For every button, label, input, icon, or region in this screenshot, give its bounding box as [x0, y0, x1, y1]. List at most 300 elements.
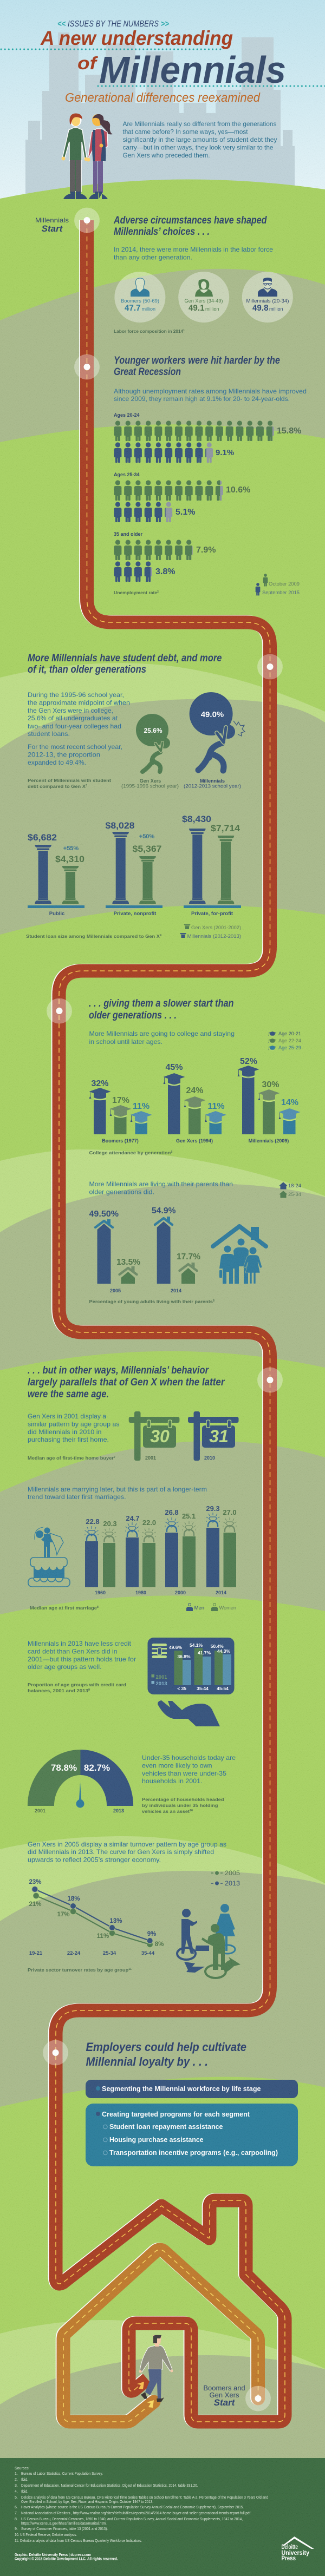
icon: sign 2001: [129, 1411, 179, 1461]
logo: Deloitte University Press: Press: [282, 2555, 296, 2562]
text block: For the most recent school year,: [28, 743, 122, 751]
columns: private for-profit: Private, for-profit: [191, 911, 233, 917]
chart: turnover rates: 35-44: [141, 1950, 155, 1956]
bars 2000: 26.8: [165, 1508, 179, 1516]
kicker: << ISSUES BY THE NUMBERS >>: [57, 19, 169, 29]
heading: Employers could help cultivate: [86, 2040, 246, 2054]
bars: Millennials: 14%: [281, 1098, 298, 1107]
panel: living with parents: [89, 1180, 301, 1304]
vehicles text: vehicles than were under-35: [142, 1770, 226, 1777]
text block: [114, 387, 307, 403]
chart: percentage living with parents: 2014: [171, 1288, 181, 1293]
icon: hand: [158, 1700, 220, 1726]
man: [62, 114, 88, 199]
text block: 25.6% of all undergraduates at: [28, 714, 118, 722]
chart: student loan size: [26, 814, 241, 939]
sources: Deloitte analysis of data from US Census Bureau, CPS Historical Time Series Tables on School Enrollment: Table A-2. Percentage of the Population 3 Years Old and: [21, 2496, 268, 2500]
chart: ages 20-24: [114, 412, 301, 463]
logo: Deloitte University Press: University: [282, 2550, 310, 2557]
text block: In 2014, there were more Millennials in the labor force: [114, 246, 273, 253]
vehicles gauge: 2001: [35, 1808, 46, 1813]
sources: 7.: [15, 2512, 18, 2515]
caption: College attendance by generation: [89, 1150, 163, 1155]
turnover text: upwards to reflect 2005’s stronger economy.: [28, 1856, 161, 1864]
title of: of: [77, 53, 98, 73]
caption: debt compared to Gen X: [28, 784, 81, 789]
columns: private for-profit: [182, 814, 241, 917]
chart: turnover rates: 25-34: [103, 1950, 116, 1956]
box: segmenting: Segmenting the Millennial workforce by life stage: [102, 2085, 261, 2093]
icon: wedding cake: [28, 1527, 70, 1587]
icon: man walking through door: [139, 2335, 173, 2402]
sources: Ibid.: [21, 2478, 28, 2482]
legend: 25-34: [288, 1192, 301, 1198]
caption: 3: [86, 784, 87, 787]
chart: turnover rates: [29, 1879, 164, 1956]
chart: median age at first marriage: [30, 1504, 237, 1611]
caption: Labor force composition in 2014: [114, 328, 185, 334]
city skyline: [25, 32, 295, 194]
legend: [211, 1870, 240, 1887]
columns: private for-profit: $7,714: [211, 823, 240, 833]
chart: ages 20-24: Ages 20-24: [114, 412, 140, 418]
footer: [0, 2458, 325, 2576]
bars 2014: 2014: [216, 1590, 226, 1595]
credits: [15, 2553, 118, 2561]
intro text: that came before? In some ways, yes—most: [122, 128, 248, 135]
chart: percentage living with parents: 49.50%: [89, 1210, 119, 1219]
caption: [28, 1682, 126, 1693]
legend: Age 25-29: [278, 1045, 301, 1051]
road: main path: [55, 220, 285, 2422]
credit card text: older age groups as well.: [28, 1663, 102, 1671]
heading: [86, 2040, 246, 2068]
legend: Millennials (2012-2013): [187, 934, 241, 939]
stat: Millennials: Millennials (20-34): [246, 298, 289, 304]
icon: turnover people cycle: [177, 1904, 240, 1978]
bars: Boomers: [89, 1079, 152, 1144]
columns: private nonprofit: $5,367: [132, 844, 161, 854]
bars 1980: 22.0: [142, 1519, 156, 1527]
chart: turnover rates: 11%: [97, 1933, 109, 1940]
chart: percentage living with parents: 13.5%: [116, 1258, 140, 1267]
caption: vehicles as an asset: [142, 1809, 186, 1814]
chart: percentage living with parents: 2005: [110, 1288, 121, 1293]
chart: percentage living with parents: 17.7%: [177, 1252, 200, 1261]
figure labels: Millennials: [200, 778, 225, 784]
legend: October 2009: [269, 581, 300, 587]
text block: similar pattern by age group as: [28, 1420, 119, 1428]
text block: [89, 1030, 235, 1046]
legend: 2005: [225, 1870, 240, 1877]
text block: the approximate midpoint of when: [28, 699, 130, 707]
panel: college attendance: [89, 998, 301, 1155]
dotted rule bottom: [98, 86, 325, 87]
turnover text: Gen Xers in 2005 display a similar turnover pattern by age group as: [28, 1841, 226, 1848]
label: Millennials start: [35, 216, 69, 234]
stat: Gen Xers: 49.1: [188, 304, 205, 313]
bars: Millennials: 30%: [262, 1080, 280, 1089]
text block: than any other generation.: [114, 253, 192, 261]
icon: sign 2010: 2010: [204, 1455, 215, 1461]
marriage text: Millennials are marrying later, but this is part of a longer-term: [28, 1486, 207, 1493]
columns: public: +55%: [63, 845, 79, 852]
figure labels: [121, 778, 241, 789]
text block: [89, 1180, 233, 1196]
chart: credit card: 45-54: [217, 1686, 229, 1691]
dotted rule top: [1, 49, 222, 50]
chart: credit card: < 35: [177, 1686, 186, 1691]
caption: [142, 1797, 224, 1814]
intro text: Gen Xers who preceded them.: [122, 152, 210, 159]
turnover text: did Millennials in 2013. The curve for Gen Xers is simply shifted: [28, 1848, 214, 1856]
caption: 9: [88, 1688, 90, 1692]
bars 1980: 1980: [135, 1590, 146, 1595]
chart: turnover rates: 21%: [29, 1901, 42, 1908]
woman: [87, 114, 113, 199]
bars 1960: [84, 1517, 117, 1595]
bars: Boomers: Boomers (1977): [102, 1138, 139, 1144]
icon: sign 2001: 2001: [145, 1455, 156, 1461]
columns: private nonprofit: $8,028: [105, 820, 134, 831]
chart: turnover rates: 13%: [109, 1918, 122, 1924]
bars 1960: 1960: [95, 1590, 106, 1595]
columns: public: $6,682: [28, 832, 57, 843]
sources: US Census Bureau, Decennial Censuses, 1890 to 1940, and Current Population Survey, Annual Social and Economic Supplements, 1947 to 2014,: [21, 2518, 243, 2521]
sources: Ibid.: [21, 2490, 28, 2494]
bars: Gen Xers: [164, 1063, 226, 1144]
heading: Adverse circumstances have shaped: [113, 215, 267, 226]
figure labels: Gen Xers: [140, 778, 161, 784]
text block: two- and four-year colleges had: [28, 722, 121, 730]
vehicles text: [142, 1754, 236, 1785]
bars: Boomers: 17%: [112, 1096, 129, 1105]
bars 1960: 22.8: [86, 1517, 100, 1526]
gauge needle: [76, 1782, 84, 1808]
chart: 35 and older: [114, 531, 216, 582]
caption: 5: [171, 1151, 173, 1154]
caption: Percentage of households headed: [142, 1797, 224, 1802]
caption: Percentage of young adults living with their parents: [89, 1299, 203, 1304]
label: Boomers and Gen Xers start: Gen Xers: [210, 2391, 239, 2399]
chart: turnover rates: 9%: [147, 1931, 156, 1937]
caption: 6: [213, 1299, 214, 1303]
sources: National Association of Realtors , http://www.realtor.org/sites/default/files/reports/2014/2014-home-buyer-and-seller-generational-trends-report-full.pdf.: [21, 2512, 251, 2515]
text block: the Gen Xers were in college,: [28, 707, 113, 714]
legend: Women: [219, 1605, 236, 1611]
chart: ages 20-24: 9.1%: [216, 448, 234, 457]
caption: Private sector turnover rates by age group: [28, 1967, 120, 1973]
heading: of it, than older generations: [28, 664, 146, 675]
stat: Boomers: million: [142, 306, 155, 312]
bars 1980: [125, 1514, 156, 1595]
stat: Millennials: [242, 272, 293, 323]
sources: Over Enrolled in School, by Age, Sex, Race, and Hispanic Origin: October 1947 to 2013.: [21, 2500, 153, 2504]
sources: 10. US Federal Reserve; Deloitte analysis.: [15, 2533, 77, 2537]
chart: ages 20-24: 15.8%: [277, 426, 301, 436]
icon: Millennial figure with debt ball: [190, 692, 245, 771]
caption: 2: [157, 590, 159, 594]
chart: credit card: 36.8%: [177, 1654, 191, 1659]
text block: since 2009, they remain high at 9.1% for 20- to 24-year-olds.: [114, 395, 290, 403]
chart: ages 25-34: [114, 472, 250, 522]
text block: Gen Xers in 2001 display a: [28, 1412, 106, 1420]
credits: Graphic: Deloitte University Press | dupress.com: [15, 2553, 91, 2557]
vehicles gauge: 2013: [113, 1808, 124, 1813]
legend: September 2015: [262, 590, 300, 596]
chart: credit card: 2013: [156, 1681, 167, 1687]
legend: [180, 924, 241, 939]
legend: [256, 574, 300, 596]
label: Boomers and Gen Xers start: Start: [214, 2397, 236, 2408]
chart: credit card: 44.3%: [217, 1648, 230, 1654]
chart: ages 25-34: 5.1%: [176, 508, 195, 517]
caption: 7: [114, 1456, 115, 1459]
chart: turnover rates: 22-24: [67, 1950, 81, 1956]
sources: 1.: [15, 2472, 18, 2476]
sources: 8.: [15, 2518, 18, 2521]
chart: credit card: 49.6%: [169, 1645, 182, 1650]
caption: 1: [183, 329, 185, 332]
text block: Although unemployment rates among Millennials have improved: [114, 387, 307, 395]
chart: turnover rates: 18%: [67, 1896, 80, 1902]
heading: largely parallels that of Gen X when the latter: [28, 1377, 225, 1388]
heading: [28, 653, 222, 675]
text block: 2012-13, the proportion: [28, 751, 100, 759]
caption: [28, 778, 111, 789]
sources: [15, 2467, 268, 2543]
chart: turnover rates: 8%: [155, 1941, 164, 1948]
text block: in school until later ages.: [89, 1038, 162, 1046]
caption: 11: [128, 1968, 132, 1971]
arrow: orange road: [147, 2400, 154, 2408]
credit card text: 2001—but this pattern holds true for: [28, 1655, 136, 1663]
chart: credit card: 50.4%: [211, 1644, 224, 1649]
credit card text: Millennials in 2013 have less credit: [28, 1640, 132, 1647]
credits: Copyright © 2015 Deloitte Development LLC. All rights reserved.: [15, 2557, 118, 2561]
stat: Boomers: 47.7: [125, 304, 141, 313]
sources: 2.: [15, 2478, 18, 2482]
icon: sign 2010: [188, 1411, 238, 1461]
sources: Haver Analytics (whose source is the US Census Bureau’s Current Population Survey Annual Social and Economic Supplement), September 2015.: [21, 2506, 244, 2509]
chart: percentage living with parents: 54.9%: [152, 1206, 176, 1215]
chart: percentage living with parents: [89, 1206, 200, 1293]
legend: Men: [194, 1605, 204, 1611]
text block: older generations did.: [89, 1188, 154, 1196]
road: orange path for Boomers and Gen Xers: [62, 2249, 258, 2422]
intro text: [122, 120, 277, 159]
title Millennials: Millennials: [99, 49, 286, 91]
stat: Boomers: [114, 272, 165, 323]
chart: college attendance by generation: [89, 1057, 300, 1155]
panel: labor force: [113, 215, 293, 334]
chart: ages 25-34: Ages 25-34: [114, 472, 140, 477]
columns: public: $4,310: [55, 854, 84, 864]
arrow: red road end: [137, 2382, 144, 2389]
panel: student debt: [26, 653, 245, 939]
chart: credit card: 35-44: [197, 1686, 209, 1691]
sources: 4.: [15, 2490, 18, 2494]
sources: Sources:: [15, 2467, 30, 2470]
caption: Student loan size among Millennials compared to Gen X: [26, 934, 148, 939]
sources: Survey of Consumer Finances, table 13 (2001 and 2013).: [21, 2527, 108, 2531]
sources: 9.: [15, 2527, 18, 2531]
heading: Millennial loyalty by . . .: [86, 2055, 208, 2068]
caption: Median age of first-time home buyer: [28, 1455, 107, 1461]
box: targeted programs: [86, 2104, 298, 2166]
sources: 6.: [15, 2506, 18, 2509]
bars: Gen Xers: 11%: [207, 1102, 225, 1111]
card chip: [152, 1644, 167, 1658]
stat: Millennials: million: [269, 306, 283, 312]
sources: 5.: [15, 2496, 18, 2500]
heading: were the same age.: [28, 1389, 109, 1400]
legend: Age 22-24: [278, 1038, 301, 1044]
marriage text: trend toward later first marriages.: [28, 1493, 126, 1501]
box: targeted programs: Housing purchase assistance: [109, 2136, 204, 2144]
chart: 35 and older: 3.8%: [155, 567, 175, 576]
columns: public: [28, 832, 84, 917]
vehicles gauge: [28, 1750, 133, 1813]
bars 2000: [165, 1508, 196, 1595]
text block: [28, 691, 130, 766]
heading: . . . giving them a slower start than: [89, 998, 234, 1009]
columns: private nonprofit: +50%: [139, 833, 154, 840]
intro text: carry—but in other ways, they look very similar to the: [122, 144, 274, 152]
bars: Gen Xers: 24%: [186, 1086, 204, 1095]
heading: Millennials’ choices . . .: [114, 226, 210, 238]
box: targeted programs: Student loan repayment assistance: [109, 2123, 223, 2131]
label: Millennials start: Millennials: [35, 216, 69, 224]
columns: private for-profit: $8,430: [182, 814, 211, 824]
vehicles gauge: 82.7%: [84, 1763, 110, 1773]
icon: family under roof: [213, 1226, 266, 1284]
bars: Millennials: Millennials (2009): [249, 1138, 289, 1144]
box: segmenting: [86, 2080, 298, 2098]
text block: purchasing their first home.: [28, 1436, 109, 1443]
stat: Gen Xers: million: [205, 306, 219, 312]
icon: sign 2010: 31: [209, 1427, 229, 1446]
bars 2014: 29.3: [206, 1504, 220, 1513]
chart: credit card: [147, 1638, 234, 1694]
bars: Gen Xers: Gen Xers (1994): [176, 1138, 213, 1144]
panel: unemployment: [114, 355, 307, 596]
chart: credit card: 54.1%: [190, 1642, 203, 1648]
chart: turnover rates: 19-21: [29, 1950, 43, 1956]
stat: Gen Xers: Gen Xers (34-49): [184, 298, 223, 304]
legend: 2013: [225, 1881, 240, 1887]
text block: [28, 1412, 119, 1443]
caption: Median age at first marriage: [30, 1605, 91, 1611]
caption: Unemployment rate: [114, 590, 157, 595]
chart: turnover rates: 17%: [57, 1911, 70, 1918]
bars 2014: 27.0: [223, 1508, 237, 1516]
panel: parallels with Gen X: [28, 1365, 240, 1978]
intro text: Are Millennials really so different from the generations: [122, 120, 276, 128]
vehicles text: households in 2001.: [142, 1777, 203, 1785]
icon: sign 2001: 30: [150, 1427, 170, 1446]
chart: 35 and older: 7.9%: [196, 546, 216, 555]
legend: [268, 1031, 301, 1051]
text block: student loans.: [28, 730, 70, 738]
turnover text: [28, 1841, 226, 1864]
columns: private nonprofit: [105, 820, 162, 917]
caption: balances, 2001 and 2013: [28, 1688, 81, 1693]
legend: [186, 1603, 236, 1611]
sources: Department of Education, National Center for Education Statistics, Digest of Education Statistics, 2014, table 331.20.: [21, 2484, 198, 2488]
bars 1960: 20.3: [103, 1520, 117, 1528]
icon: couple: [62, 114, 113, 199]
bars 2014: [206, 1504, 237, 1595]
icon: Gen X figure with debt ball: 25.6%: [144, 727, 162, 734]
bars: Boomers: 32%: [91, 1079, 109, 1088]
panel: employers: [86, 2040, 298, 2166]
chart: 35 and older: 35 and older: [114, 531, 143, 537]
heading: Younger workers were hit harder by the: [114, 355, 280, 366]
heading: Great Recession: [114, 366, 181, 378]
vehicles text: even more likely to own: [142, 1762, 212, 1770]
text block: More Millennials are going to college and staying: [89, 1030, 235, 1037]
bars 1980: 24.7: [126, 1514, 140, 1522]
text block: More Millennials are living with their parents than: [89, 1180, 233, 1188]
logo: Deloitte University Press: [282, 2536, 314, 2562]
credit card text: card debt than Gen Xers did in: [28, 1647, 117, 1655]
heading: [28, 1365, 225, 1400]
caption: by individuals under 35 holding: [142, 1803, 218, 1808]
caption: 4: [160, 934, 161, 937]
box: targeted programs: Transportation incentive programs (e.g., carpooling): [109, 2149, 278, 2157]
logo: Deloitte University Press: Deloitte: [282, 2544, 298, 2551]
heading: [89, 998, 234, 1021]
label: Millennials start: Start: [42, 224, 63, 234]
figure labels: (1995-1996 school year): [121, 784, 179, 789]
caption: 10: [190, 1809, 193, 1812]
legend: Gen Xers (2001-2002): [191, 925, 241, 931]
legend: 18-24: [288, 1183, 301, 1189]
caption: 8: [97, 1606, 99, 1609]
icon: Millennial figure with debt ball: 49.0%: [201, 710, 224, 719]
bars 2000: 25.1: [182, 1512, 196, 1520]
vehicles gauge: 78.8%: [51, 1763, 77, 1773]
columns: private nonprofit: Private, nonprofit: [114, 911, 157, 917]
sources: Bureau of Labor Statistics, Current Population Survey.: [21, 2472, 103, 2476]
sources: 3.: [15, 2484, 18, 2488]
bars: Millennials: [237, 1057, 300, 1144]
title line 1: A new understanding: [40, 27, 233, 49]
marriage text: [28, 1486, 207, 1501]
text block: expanded to 49.4%.: [28, 759, 86, 766]
people: [181, 1909, 197, 1954]
bars: Boomers: 11%: [133, 1102, 150, 1111]
vehicles text: Under-35 households today are: [142, 1754, 236, 1762]
heading: . . . but in other ways, Millennials’ behavior: [28, 1365, 209, 1376]
chart: credit card: 2001: [156, 1674, 167, 1680]
columns: public: Public: [49, 911, 64, 917]
caption: Percent of Millennials with student: [28, 778, 111, 783]
figure labels: (2012-2013 school year): [184, 784, 241, 789]
sources: 11. Deloitte analysis of data from US Census Bureau Quarterly Workforce Indicators.: [15, 2539, 142, 2543]
text block: [114, 246, 273, 261]
chart: turnover rates: 23%: [29, 1879, 42, 1885]
label: Boomers and Gen Xers start: Boomers and: [203, 2384, 245, 2392]
heading: [114, 355, 280, 378]
waypoint markers: [43, 208, 283, 2411]
credit card text: [28, 1640, 136, 1671]
heading: [113, 215, 267, 238]
heading: older generations . . .: [89, 1010, 177, 1021]
legend: [280, 1182, 301, 1198]
label: Boomers and Gen Xers start: [203, 2384, 245, 2408]
